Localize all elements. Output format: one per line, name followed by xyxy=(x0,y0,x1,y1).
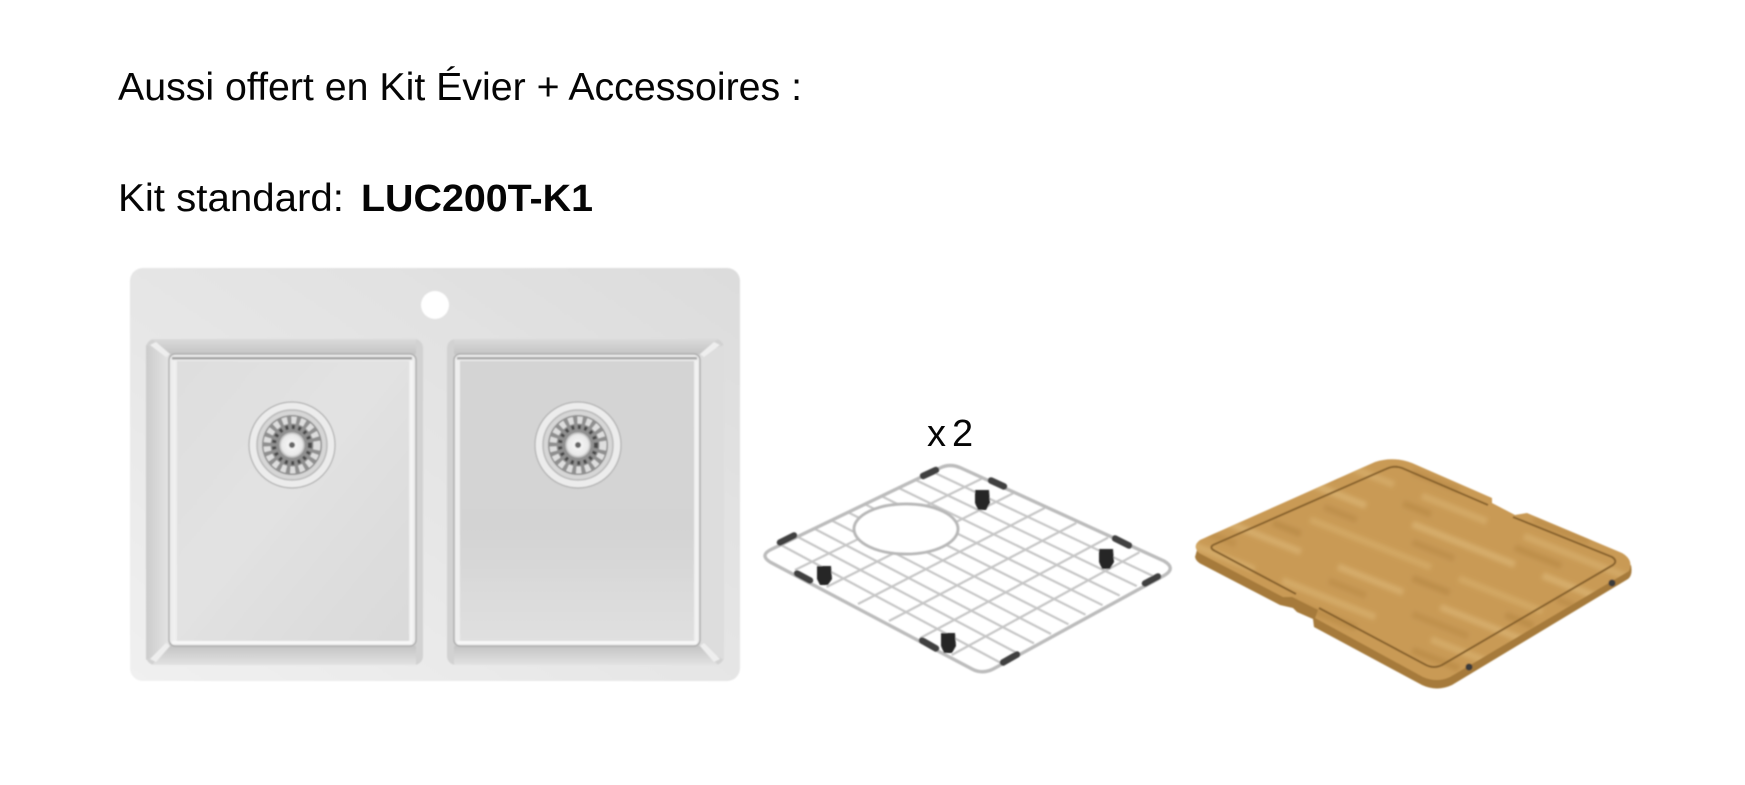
wood grain xyxy=(1196,468,1626,668)
screws xyxy=(1608,580,1616,586)
product image: wire bottom grid xyxy=(765,466,1170,672)
left basin xyxy=(146,339,423,665)
product image: double bowl stainless sink xyxy=(130,268,740,681)
heading: aussi offert en kit: Aussi offert en Kit Évier + Accessoires : xyxy=(118,66,802,109)
board side thickness xyxy=(1195,550,1632,688)
quantity label: x 2: x xyxy=(927,413,946,455)
outer wire frame xyxy=(765,466,1170,672)
right drain strainer xyxy=(535,402,621,488)
right basin xyxy=(447,339,724,665)
subheading: kit standard model: Kit standard: xyxy=(118,177,344,220)
drain cut-out ring xyxy=(854,504,958,554)
product image: bamboo cutting board xyxy=(1194,458,1633,690)
notch cut-out xyxy=(1283,597,1318,618)
juice groove xyxy=(1211,467,1615,667)
quantity label: x 2: 2 xyxy=(952,413,973,455)
quantity label: x 2 xyxy=(927,413,973,455)
rubber edge bumpers xyxy=(780,470,1158,662)
board top surface xyxy=(1196,459,1630,680)
rubber feet xyxy=(817,490,1114,653)
subheading: kit standard model xyxy=(118,177,593,220)
left drain strainer xyxy=(249,402,335,488)
faucet hole xyxy=(421,291,449,319)
subheading: kit standard model: LUC200T-K1 xyxy=(361,178,593,220)
